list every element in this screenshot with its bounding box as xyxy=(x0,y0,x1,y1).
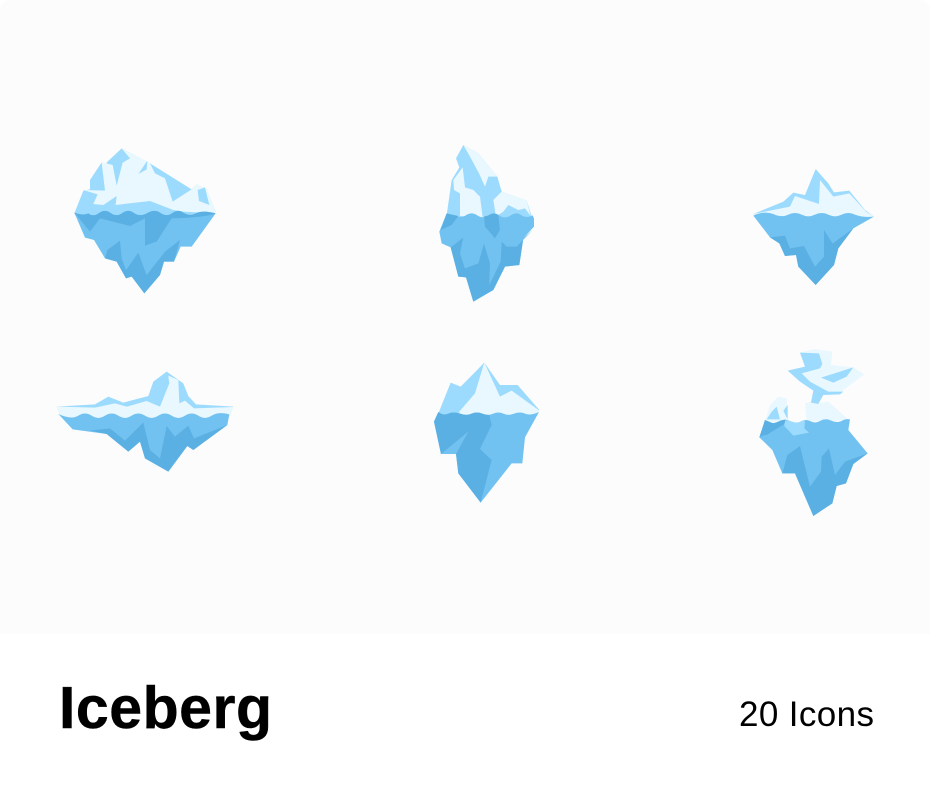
icon: iceberg 3 xyxy=(753,169,874,285)
icon count: 20 Icons xyxy=(739,695,874,734)
icon: iceberg 4 xyxy=(57,372,233,472)
icon: iceberg 6 xyxy=(759,349,868,516)
icon: iceberg 5 xyxy=(434,363,539,503)
icon: iceberg 1 xyxy=(74,148,216,293)
icon: iceberg 2 xyxy=(439,145,534,302)
title: Iceberg xyxy=(59,675,272,741)
